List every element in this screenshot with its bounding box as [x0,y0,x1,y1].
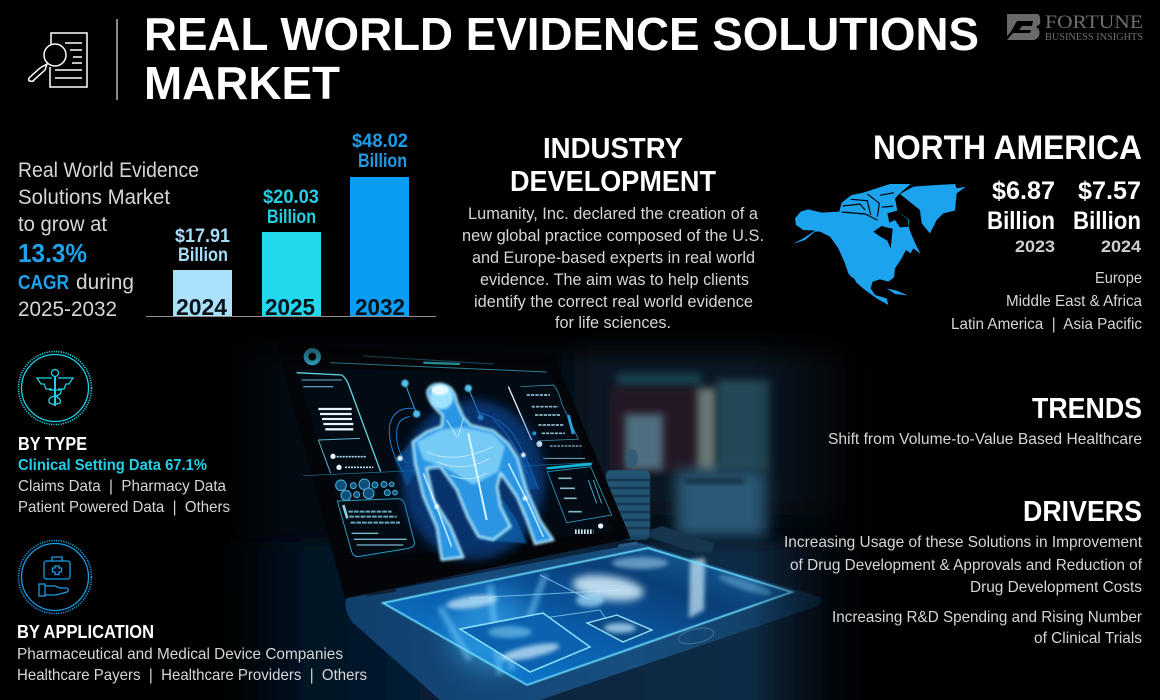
glowing touch panel [383,548,792,685]
drivers: of Clinical Trials [1034,630,1142,647]
legs ghost [460,497,527,543]
logo: Fortune Business Insights: FORTUNE [1045,12,1143,33]
other regions [951,270,1142,333]
trends: Shift from Volume-to-Value Based Healthcare [828,431,1142,448]
by application: BY APPLICATION [17,622,154,642]
bar 2025: Billion [267,207,316,228]
title divider [116,19,118,100]
industry development text: and Europe-based experts in real world [472,248,755,267]
logo: Fortune Business Insights: BUSINESS INSIGHTS [1045,32,1143,43]
bar 2024: $17.91 [175,226,230,247]
logo: Fortune Business Insights [1007,12,1143,43]
market growth text block: 13.3% [18,238,87,268]
laptop photo background [215,325,1160,700]
value 2023 [987,177,1055,256]
by application [17,622,367,684]
bar 2025 [262,187,321,320]
north america heading: NORTH AMERICA [873,129,1142,167]
by application: Pharmaceutical and Medical Device Companies [17,646,343,663]
bar 2032: $48.02 [352,131,408,152]
value 2023: Billion [987,207,1055,235]
table [225,542,875,700]
industry development heading: INDUSTRY [543,133,683,165]
market growth text block: CAGR [18,272,69,294]
industry development text [462,204,764,332]
bar 2025: 2025 [265,294,315,320]
screen reflection [689,558,705,618]
icon: caduceus [18,352,92,424]
value 2024: $7.57 [1078,177,1141,205]
market growth text block: to grow at [18,213,107,236]
bar 2032: 2032 [355,294,405,320]
title: MARKET [144,57,340,109]
bar 2032 [350,131,409,320]
bar chart [146,131,436,320]
other regions: Middle East & Africa [1006,293,1142,310]
other regions: Latin America | Asia Pacific [951,316,1142,333]
bar 2032: Billion [358,151,407,172]
other regions: Europe [1095,270,1142,287]
value 2024 [1073,177,1142,256]
market growth text block [18,159,199,321]
drivers: Increasing Usage of these Solutions in Improvement [784,534,1143,551]
industry development heading: DEVELOPMENT [510,166,716,198]
title: REAL WORLD EVIDENCE SOLUTIONS [144,8,979,60]
bar 2024: Billion [178,245,228,266]
market growth text block: Solutions Market [18,186,170,209]
by type [18,434,230,516]
bar 2025: $20.03 [263,187,319,208]
hologram wings and nerves [389,383,538,490]
panel window large [460,613,590,672]
by type: BY TYPE [18,434,87,454]
north america values [987,177,1142,256]
north america map [793,184,966,305]
drivers: Drug Development Costs [970,579,1142,596]
bar 2024 [173,226,232,320]
icon: document with magnifier [29,33,87,87]
industry development text: for life sciences. [555,313,671,332]
trends [828,393,1142,448]
value 2024: Billion [1073,207,1141,235]
market growth text block: 2025-2032 [18,298,117,321]
blurred room [230,335,880,595]
scan line [303,463,593,476]
screen ui top bar [306,350,547,372]
market growth text block: during [76,271,134,294]
by type: Clinical Setting Data 67.1% [18,457,207,474]
by application: Healthcare Payers | Healthcare Providers | Others [17,667,367,684]
industry development heading [510,133,716,198]
human body hologram [395,384,553,560]
industry development text: Lumanity, Inc. declared the creation of a [468,204,759,223]
drivers: Increasing R&D Spending and Rising Number [832,609,1143,626]
value 2023: $6.87 [992,177,1055,205]
industry development text: new global practice composed of the U.S. [462,226,764,245]
drivers: DRIVERS [1023,496,1142,528]
panel window small [587,615,652,642]
glass jar [606,449,650,540]
edge fades [215,325,1160,700]
value 2023: 2023 [1015,237,1055,256]
drivers: of Drug Development & Approvals and Reduction of [790,557,1143,574]
screen ui right panels [508,385,612,532]
trends: TRENDS [1032,393,1142,425]
value 2024: 2024 [1101,237,1142,256]
phone on table [650,526,714,552]
by type: Patient Powered Data | Others [18,499,230,516]
screen ui left panels [297,373,415,557]
industry development text: identify the correct real world evidence [474,292,753,311]
title [144,8,979,109]
drivers [784,496,1143,647]
laptop base [345,541,822,700]
industry development text: evidence. The aim was to help clients [480,270,749,289]
icon: medical kit and hand [18,540,92,614]
market growth text block: Real World Evidence [18,159,199,182]
by type: Claims Data | Pharmacy Data [18,478,226,495]
laptop screen [277,345,631,598]
bar 2024: 2024 [176,294,227,320]
